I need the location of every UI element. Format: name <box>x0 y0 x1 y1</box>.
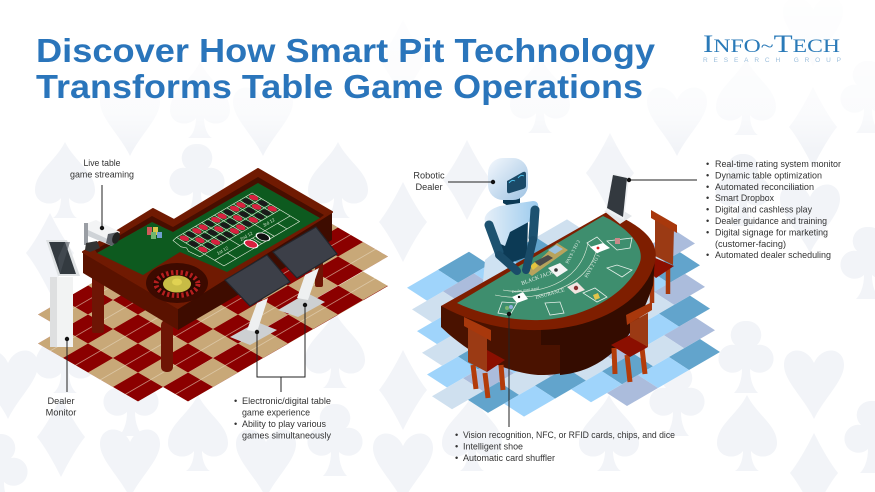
blackjack table body <box>441 255 655 375</box>
chips <box>147 227 162 239</box>
list: table monitor features: Digital and cashless play <box>715 205 812 215</box>
list: table monitor features: • <box>706 170 709 180</box>
label: live table game streaming: game streaming <box>70 170 134 180</box>
dealer tablet on blackjack table <box>604 173 632 224</box>
terminal screens <box>225 227 337 306</box>
list: felt and shoe features: • <box>455 430 458 440</box>
label: robotic dealer: Robotic <box>413 170 445 180</box>
label: robotic dealer: Dealer <box>415 182 443 192</box>
felt markings: INSURANCE <box>535 287 565 301</box>
robot visor <box>507 172 526 193</box>
list: table monitor features <box>706 159 841 260</box>
label: dealer monitor <box>46 396 76 418</box>
list: digital table features: game experience <box>242 408 310 418</box>
chair: right rear <box>645 210 677 303</box>
list: table monitor features: • <box>706 193 709 203</box>
label: robotic dealer <box>413 170 445 192</box>
list: digital table features: Ability to play various <box>242 419 326 429</box>
list: table monitor features: Digital signage for marketing <box>715 227 828 237</box>
list: table monitor features: Real-time rating system monitor <box>715 159 841 169</box>
leader: live table game streaming <box>100 185 104 230</box>
chair: right front <box>611 302 652 382</box>
label: live table game streaming <box>70 158 134 180</box>
felt markings: PAYS 2 TO 1 <box>584 253 602 279</box>
leader: table monitor <box>627 178 697 182</box>
playing cards <box>512 243 610 303</box>
list: digital table features <box>234 396 331 440</box>
icon: streaming camera <box>84 220 121 252</box>
label: dealer monitor: Dealer <box>47 396 75 406</box>
robotic dealer <box>483 158 538 282</box>
logo: Info-Tech Research Group: RESEARCH GROUP <box>703 57 841 64</box>
label: dealer monitor: Monitor <box>46 408 76 418</box>
icon: dealer monitor kiosk <box>46 240 80 347</box>
leader: felt sensors <box>507 312 511 427</box>
betting labels <box>216 217 276 256</box>
floor: red and tan checker <box>38 184 388 402</box>
chips on felt <box>505 238 620 310</box>
felt markings <box>495 237 632 315</box>
blackjack table <box>441 212 656 375</box>
betting labels: 2nd 12 <box>239 230 254 242</box>
list: table monitor features: Dynamic table optimization <box>715 170 822 180</box>
roulette table <box>83 169 332 372</box>
logo: Info-Tech Research Group: INFO~ TECH <box>703 31 840 58</box>
betting layout <box>171 193 300 270</box>
terminal stand front <box>230 298 277 345</box>
list: table monitor features: • <box>706 205 709 215</box>
roulette wheel <box>146 263 208 303</box>
leader: digital table bracket <box>255 303 307 392</box>
felt markings: Dealer must stand <box>512 286 539 294</box>
robot forearms and hands <box>499 240 533 271</box>
list: felt and shoe features: Automatic card shuffler <box>463 453 555 463</box>
list: table monitor features: • <box>706 159 709 169</box>
floor: blue isometric tiles <box>407 219 720 417</box>
list: table monitor features: Automated dealer scheduling <box>715 250 831 260</box>
list: felt and shoe features: Intelligent shoe <box>463 442 523 452</box>
table body <box>83 169 332 330</box>
list: felt and shoe features: Vision recognition, NFC, or RFID cards, chips, and dice <box>463 430 675 440</box>
title: Transforms Table Game Operations <box>36 68 643 105</box>
list: felt and shoe features: • <box>455 453 458 463</box>
terminal stand rear <box>278 268 325 317</box>
robot neck <box>503 197 520 208</box>
list: table monitor features: Automated reconciliation <box>715 182 814 192</box>
list: felt and shoe features <box>455 430 675 463</box>
list: table monitor features: • <box>706 216 709 226</box>
table legs <box>92 240 323 372</box>
leader: robotic dealer <box>448 180 495 184</box>
list: table monitor features: • <box>706 182 709 192</box>
title: Discover How Smart Pit Technology <box>36 32 656 69</box>
list: table monitor features: • <box>706 227 709 237</box>
digital table game terminals <box>225 227 337 345</box>
blackjack table rim <box>441 212 656 330</box>
robot torso <box>497 220 528 263</box>
list: felt and shoe features: • <box>455 442 458 452</box>
title <box>36 32 656 105</box>
list: digital table features: • <box>234 396 237 406</box>
blackjack felt <box>457 216 641 320</box>
robot head <box>488 158 528 200</box>
list: digital table features: Electronic/digital table <box>242 396 331 406</box>
betting labels: 3rd 12 <box>262 217 276 228</box>
leader: dealer monitor <box>65 337 69 392</box>
list: table monitor features: • <box>706 250 709 260</box>
robot upper arms <box>489 210 535 252</box>
list: digital table features: games simultaneously <box>242 430 331 440</box>
list: digital table features: • <box>234 419 237 429</box>
robot shoulders <box>485 201 538 246</box>
felt markings: BLACK JACK <box>521 270 554 287</box>
list: table monitor features: Smart Dropbox <box>715 193 774 203</box>
chair: left front <box>464 317 505 398</box>
list: table monitor features: (customer-facing) <box>715 239 786 249</box>
betting labels: 1st 12 <box>216 245 230 256</box>
robot lower body <box>483 250 513 282</box>
blackjack table body shadow <box>541 258 655 375</box>
felt markings: PAYS 3 TO 2 <box>565 239 582 265</box>
chip tray <box>527 243 568 276</box>
list: table monitor features: Dealer guidance and training <box>715 216 827 226</box>
label: live table game streaming: Live table <box>84 158 120 168</box>
